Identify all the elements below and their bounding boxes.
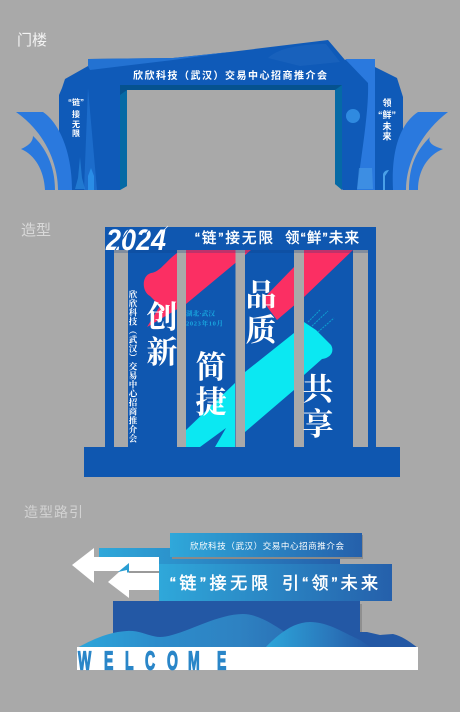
right tower [357, 168, 373, 189]
big words: 品 [246, 278, 276, 313]
wayfinding sign: 引“领”未来 [282, 574, 378, 593]
left pillar text: 接 [72, 109, 80, 119]
place and date: 湖北·武汉 [186, 308, 216, 318]
right pillar text: 领 [382, 97, 392, 108]
brush strokes [144, 250, 353, 447]
vertical event title: 欣欣科技（武汉）交易中心招商推介会 [127, 289, 138, 443]
big words: 捷 [196, 385, 226, 420]
heading: gate: 门楼 [17, 32, 47, 49]
big words [146, 278, 334, 442]
top light band [88, 52, 230, 70]
panels [128, 250, 353, 447]
welcome panel [77, 647, 418, 670]
left pillar stripe [84, 88, 97, 190]
welcome text: L [125, 647, 134, 676]
wayfinding sign [72, 533, 418, 676]
heading: wayfinding: 造型路引 [24, 504, 84, 520]
arch body [59, 40, 403, 190]
right pillar text: 来 [382, 130, 392, 142]
top header [105, 227, 376, 250]
welcome text: O [167, 647, 178, 676]
big words: 质 [246, 313, 276, 348]
map texture [268, 44, 340, 66]
big words: 新 [146, 335, 178, 370]
right statue icon [383, 170, 389, 190]
mountains [77, 614, 307, 648]
left pillar text [68, 97, 84, 138]
side pillars [105, 250, 114, 447]
wayfinding sign: 欣欣科技（武汉）交易中心招商推介会 [190, 541, 344, 551]
backdrop structure [84, 224, 400, 477]
white arrows [72, 548, 159, 583]
beam title: 欣欣科技（武汉）交易中心招商推介会 [133, 69, 328, 82]
year: 2024 [105, 224, 166, 257]
right pillar text: 未 [382, 120, 392, 132]
arch gate [16, 40, 448, 190]
header slogan: 领“鲜”未来 [285, 230, 360, 247]
logo circle [346, 109, 360, 123]
welcome text: E [217, 647, 226, 676]
welcome text: M [188, 647, 200, 676]
right pillar text [378, 97, 396, 142]
middle bar [159, 564, 392, 601]
left tower icon [75, 157, 85, 189]
welcome text: E [104, 647, 113, 676]
right curved wing [393, 112, 448, 190]
back bar [99, 548, 340, 564]
big words: 共 [302, 372, 334, 407]
left spire icon [88, 168, 94, 190]
big words: 创 [146, 300, 178, 335]
big words: 简 [196, 350, 226, 385]
left pillar text: 无 [72, 120, 80, 129]
left pillar text: “链” [68, 97, 84, 107]
left pillar text: 限 [72, 129, 80, 138]
lower block [116, 604, 362, 648]
inner shade [120, 85, 342, 190]
right light stripe [345, 59, 375, 190]
welcome text: C [145, 647, 155, 676]
header slogan [195, 230, 360, 247]
base [84, 447, 400, 477]
right pillar text: “鲜” [378, 109, 396, 120]
welcome text [78, 647, 226, 676]
place and date [186, 308, 223, 328]
wayfinding sign: “链”接无限 [170, 574, 268, 593]
header shadow [114, 250, 368, 253]
place and date: 2023年10月 [186, 318, 223, 328]
big words: 享 [302, 407, 334, 442]
welcome text: W [78, 647, 92, 676]
heading: shape: 造型 [21, 222, 51, 239]
top bar [172, 535, 363, 559]
left curved wing [16, 112, 72, 190]
header slogan: “链”接无限 [195, 230, 273, 247]
